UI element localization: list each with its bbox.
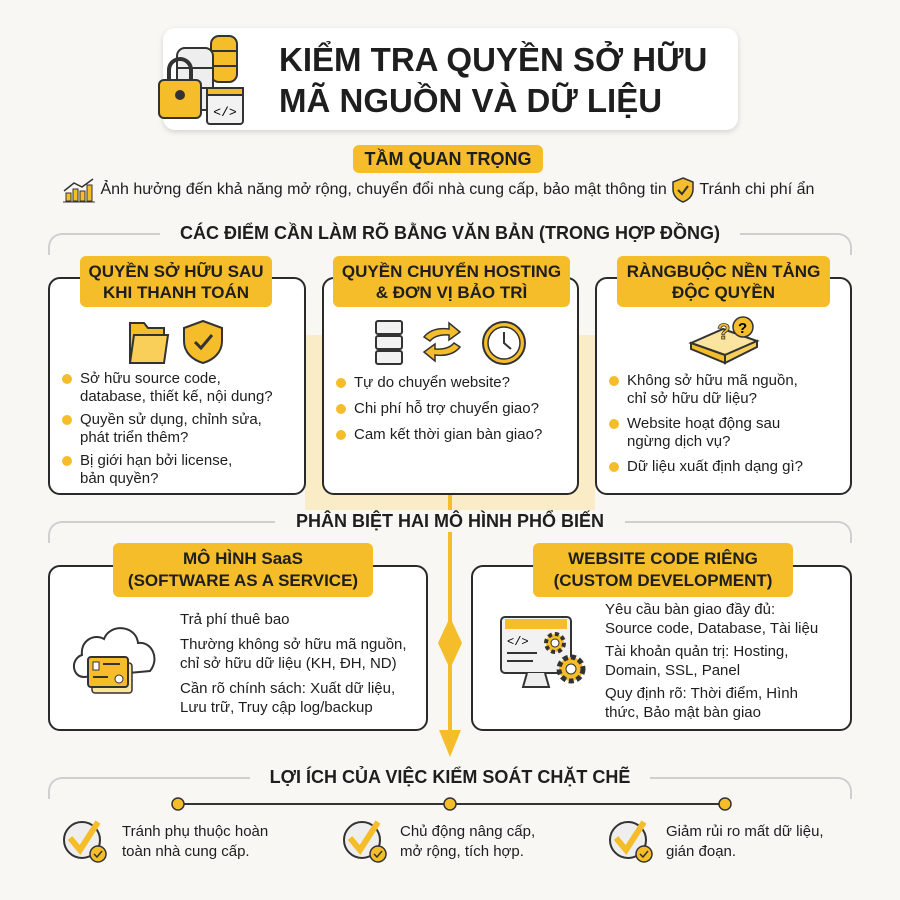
pill: panel 3 header: ĐỘC QUYỀN [672,283,775,302]
text [605,601,818,721]
section heading 1: CÁC ĐIỂM CẦN LÀM RÕ BẰNG VĂN BẢN (TRONG HỢP ĐỒNG) [180,223,720,243]
bullets [62,370,273,487]
icon: check [609,820,653,863]
text: Source code, Database, Tài liệu [605,620,818,637]
section heading 2: PHÂN BIỆT HAI MÔ HÌNH PHỔ BIẾN [296,511,604,531]
bullets [609,372,803,475]
icons: server arrows clock [375,320,526,365]
icons: folder shield [128,320,223,364]
section heading 3: LỢI ÍCH CỦA VIỆC KIỂM SOÁT CHẶT CHẼ [270,767,630,787]
benefit 2: Chủ động nâng cấp, [400,823,535,840]
bullets: Tự do chuyển website? [354,374,510,391]
pill: panel 1 header: QUYỀN SỞ HỮU SAU [88,262,264,281]
bullets: bản quyền? [80,470,158,487]
pill: panel 2 header: QUYỀN CHUYỂN HOSTING [342,262,561,281]
benefit 3 [609,820,824,863]
panel: hosting transfer [322,277,579,495]
pill: panel 1 header [80,256,272,307]
arrow: central flow [438,495,462,757]
pill: importance: TẦM QUAN TRỌNG [364,149,531,169]
icon: monitor gears: </> [507,635,529,649]
benefit 2: mở rộng, tích hợp. [400,843,524,860]
pill: panel 3 header: RÀNGBUỘC NỀN TẢNG [627,262,820,281]
bullets: Sở hữu source code, [80,370,221,387]
text: Lưu trữ, Truy cập log/backup [180,699,373,716]
icon: box question: ? [717,319,730,344]
bullets [336,374,542,443]
benefit 3: gián đoạn. [666,843,736,860]
pill: custom header: WEBSITE CODE RIÊNG [568,549,758,568]
text: Thường không sở hữu mã nguồn, [180,636,407,653]
pill: SaaS header: MÔ HÌNH SaaS [183,549,303,568]
bullets: database, thiết kế, nội dung? [80,388,273,405]
benefit 1: Tránh phụ thuộc hoàn [122,823,268,840]
benefit 1: toàn nhà cung cấp. [122,843,250,860]
icon: monitor gears [500,616,586,688]
pill: panel 2 header: & ĐƠN VỊ BẢO TRÌ [376,283,527,302]
panel: custom development [471,565,852,731]
pill: SaaS header: (SOFTWARE AS A SERVICE) [128,571,358,590]
bullets: Website hoạt động sau [627,415,780,432]
benefit 3: Giảm rủi ro mất dữ liệu, [666,823,824,840]
title text: MÃ NGUỒN VÀ DỮ LIỆU [279,82,662,119]
bullets: Quyền sử dụng, chỉnh sửa, [80,411,262,428]
icon: check [63,820,107,863]
title text: KIỂM TRA QUYỀN SỞ HỮU [279,41,707,78]
pill: panel 2 header [333,256,570,307]
bullets: phát triển thêm? [80,429,188,446]
decorative yellow band [305,335,595,515]
text: thức, Bảo mật bàn giao [605,704,761,721]
icon: box question: ? [738,320,747,337]
icon: chart [63,178,95,202]
benefit 2 [343,820,535,863]
pill: SaaS header [113,543,373,597]
bullets: chỉ sở hữu dữ liệu? [627,390,757,407]
title box [163,28,738,130]
text: Yêu cầu bàn giao đầy đủ: [605,601,775,618]
text: Trả phí thuê bao [180,611,290,628]
bullets: Chi phí hỗ trợ chuyển giao? [354,400,539,417]
pill: custom header: (CUSTOM DEVELOPMENT) [554,571,772,590]
pill: custom header [533,543,793,597]
pill: importance [353,145,543,173]
bullets: Bị giới hạn bởi license, [80,452,232,469]
pill: panel 1 header: KHI THANH TOÁN [103,283,249,302]
benefit 1 [63,820,268,863]
bullets: Không sở hữu mã nguồn, [627,372,798,389]
text: Quy định rõ: Thời điểm, Hình [605,685,798,702]
importance line [63,177,814,203]
bullets: Dữ liệu xuất định dạng gì? [627,458,803,475]
pill: panel 3 header [617,256,830,307]
text: Domain, SSL, Panel [605,662,740,679]
bullets: ngừng dịch vụ? [627,433,730,450]
panel: ownership after payment [48,277,306,495]
icon: check [343,820,387,863]
text: chỉ sở hữu dữ liệu (KH, ĐH, ND) [180,655,397,672]
icon: box question [688,316,760,365]
text [180,611,407,716]
icon: lock database code: </> [213,105,237,120]
icon: lock database code [158,35,244,125]
panel: SaaS [48,565,428,731]
panel: platform lock-in [595,277,852,495]
title text [279,41,707,119]
timeline [171,797,732,811]
icon: cloud card [72,627,156,694]
bullets: Cam kết thời gian bàn giao? [354,426,542,443]
icon: shield [672,177,694,203]
importance line: Ảnh hưởng đến khả năng mở rộng, chuyển đổi nhà cung cấp, bảo mật thông tin Tránh chi phí ẩn [100,181,814,198]
text: Cần rõ chính sách: Xuất dữ liệu, [180,680,395,697]
text: Tài khoản quản trị: Hosting, [605,643,788,660]
